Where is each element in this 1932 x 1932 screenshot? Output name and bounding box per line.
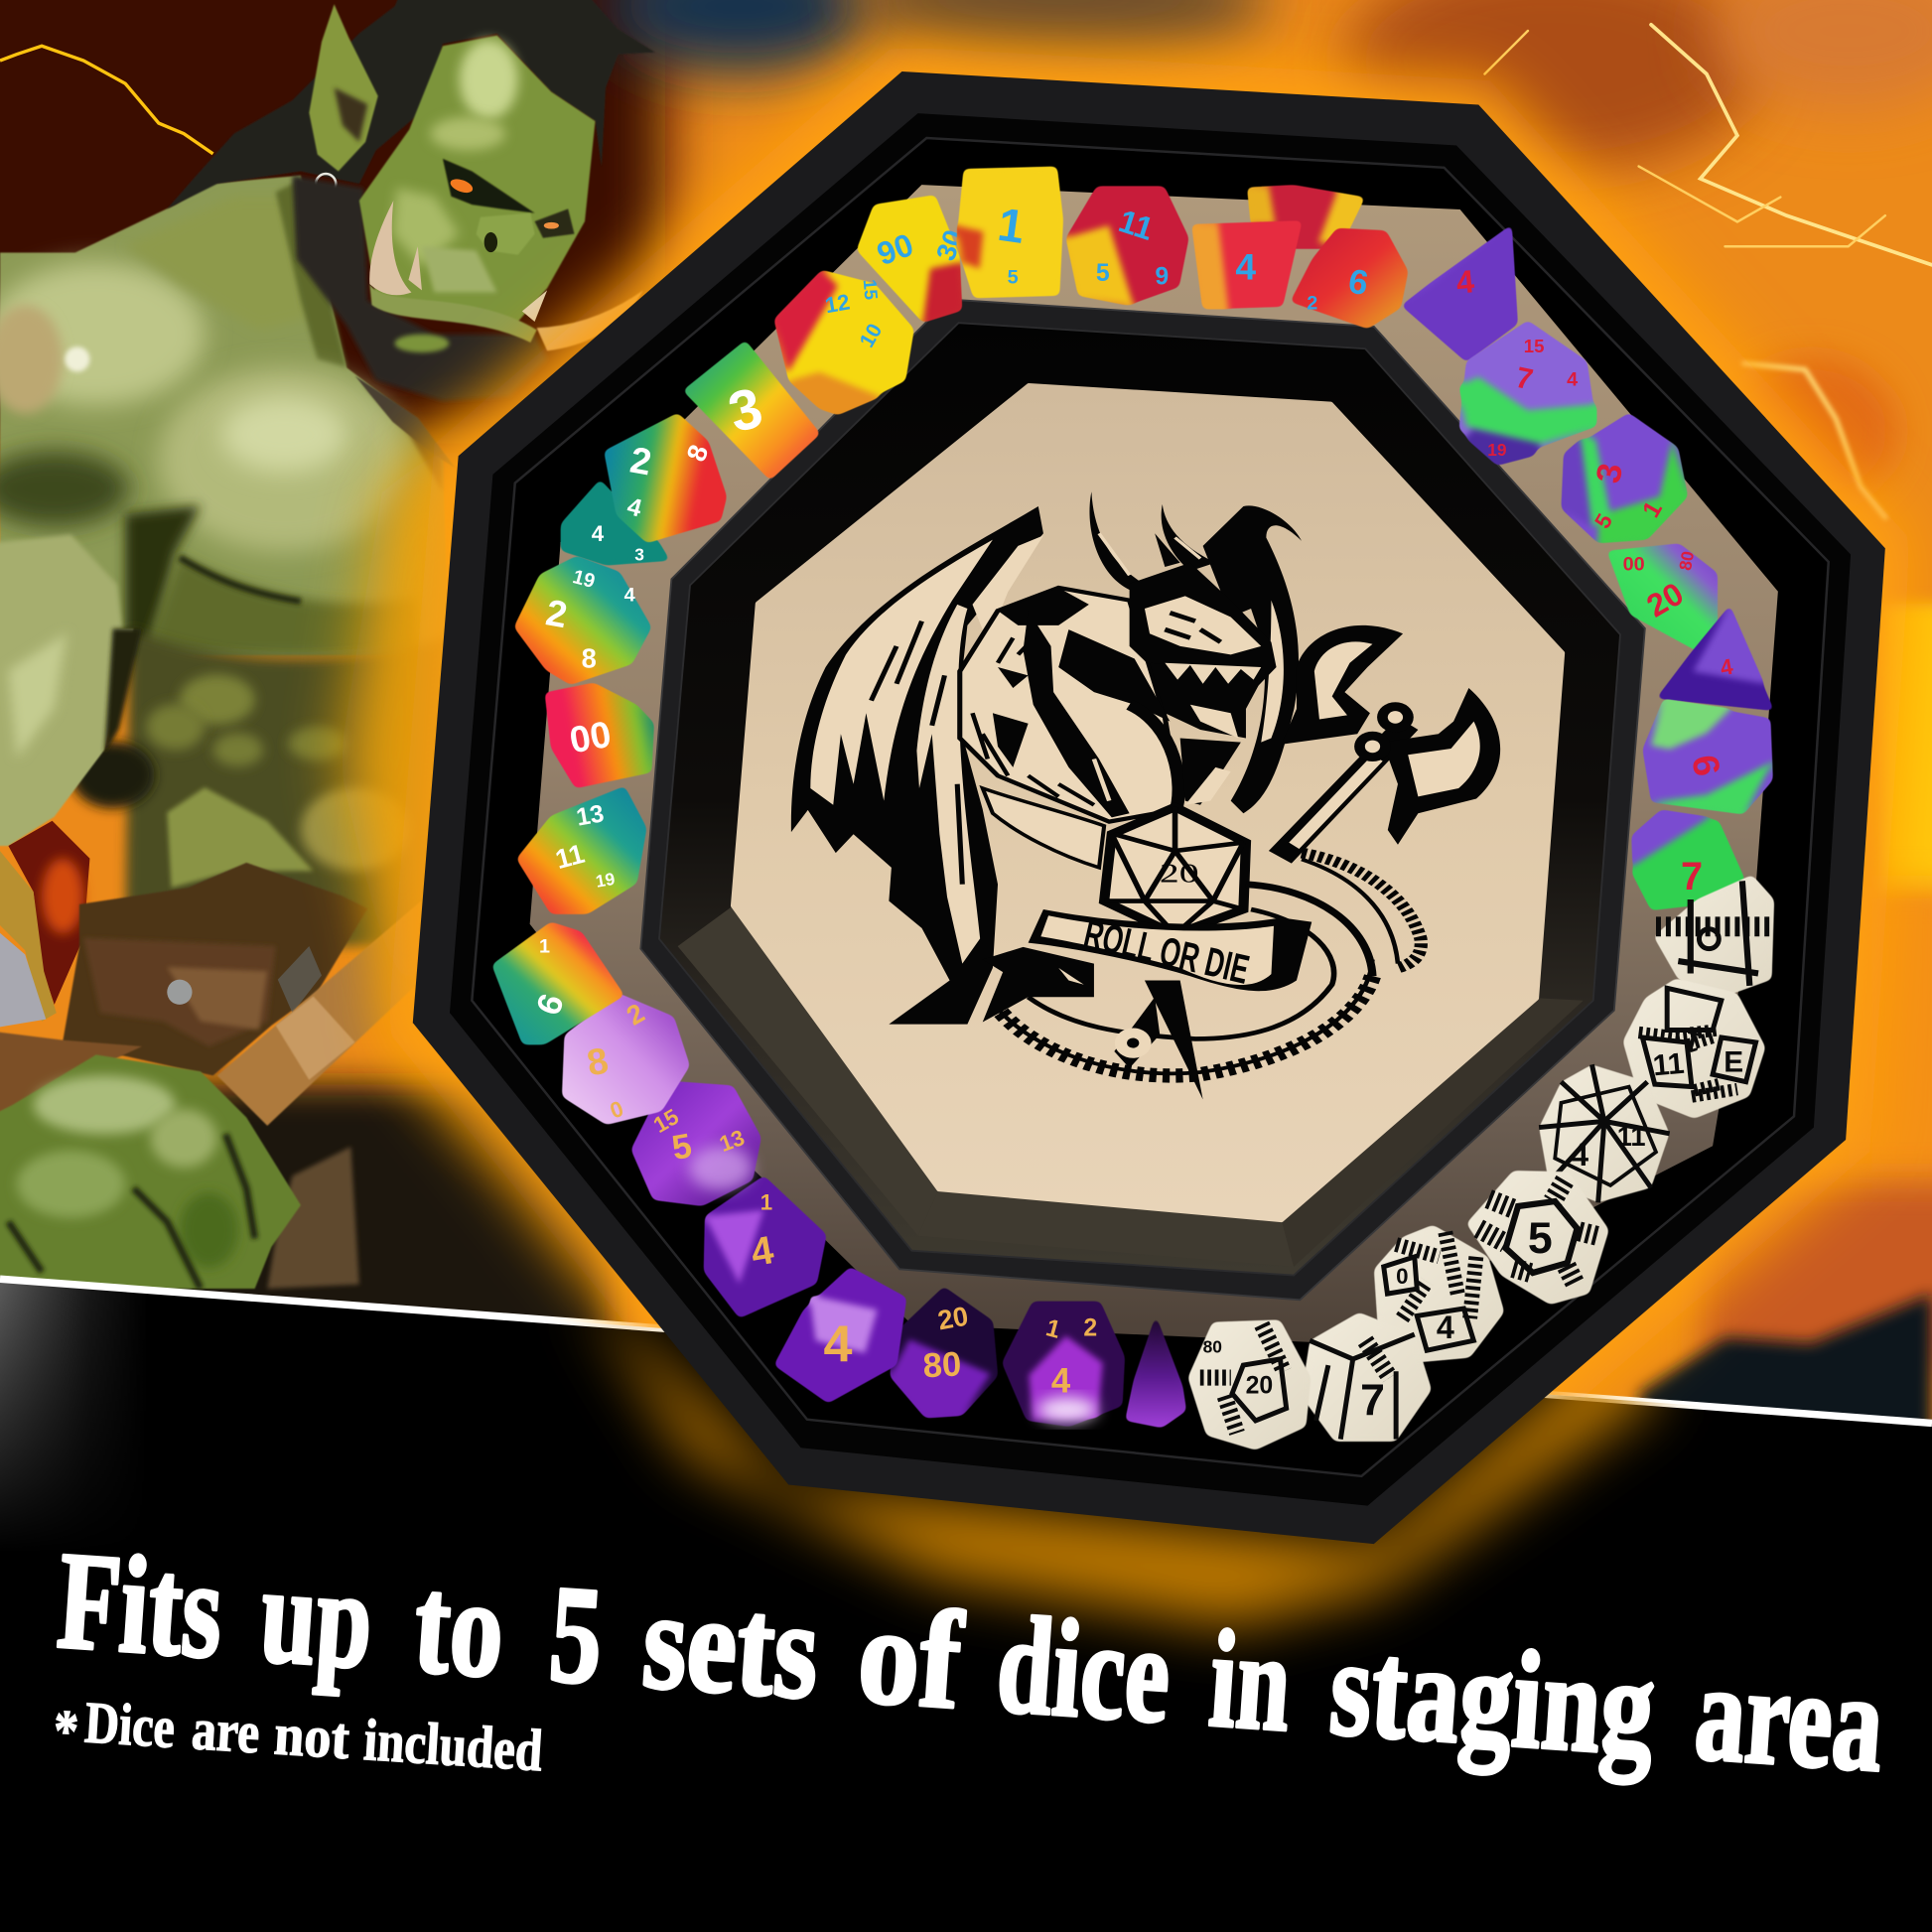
dice set: purple marble with gold numbers: 0 [607, 1096, 626, 1124]
orc arm [0, 628, 134, 846]
dice set: white with black engravings: 80 [1203, 1337, 1222, 1357]
caption: disclaimer: included [362, 1707, 544, 1783]
dragon jaw and teeth [1150, 663, 1266, 738]
caption: disclaimer: Dice [83, 1689, 177, 1760]
dice set: rainbow with white numbers: 4 [624, 493, 644, 523]
orc upper body and head [0, 0, 655, 655]
orange glow behind tray [413, 71, 1885, 1626]
illustration: green orc warrior [0, 0, 655, 1289]
tray wall: lower right [1282, 998, 1584, 1267]
caption: disclaimer [52, 1687, 544, 1793]
dice set: purple marble with gold numbers: 1 [1043, 1314, 1063, 1344]
dice set: rainbow with white numbers: 4 [592, 521, 605, 546]
amber haze over orc edge [339, 419, 530, 1171]
tray felt floor [733, 385, 1563, 1220]
dragon body [960, 588, 1241, 868]
dice set: white with black engravings [1187, 875, 1774, 1450]
dice set: purple and green with red numbers [1401, 224, 1774, 910]
orc lower lip and chin [369, 284, 537, 343]
dragon horns [1089, 491, 1215, 592]
dice set: white with black engravings: 5 [1528, 1214, 1553, 1263]
grey fade at left of band [0, 1269, 148, 1553]
orc hair [167, 0, 655, 208]
dice set: purple and green with red numbers: 19 [1487, 440, 1507, 460]
dice set: rainbow with white numbers: 19 [570, 566, 597, 593]
dice set: red and yellow with blue numbers: 5 [1096, 260, 1110, 287]
dice set: white with black engravings: 20 [1246, 1373, 1273, 1400]
dagger with pentagram lines [1114, 980, 1203, 1099]
caption: headline: in [1205, 1601, 1296, 1761]
caption: headline: 5 [545, 1557, 608, 1714]
caption: headline: of [854, 1578, 968, 1738]
dice set: red and yellow with blue numbers: 1 [995, 198, 1028, 253]
d20 die [1104, 807, 1246, 934]
orc face [359, 36, 596, 322]
axe [1269, 625, 1500, 864]
dice set: red and yellow with blue numbers: 4 [1235, 246, 1256, 288]
dice set: red and yellow with blue numbers: 5 [1008, 266, 1019, 288]
white diagonal line [0, 1279, 1932, 1423]
dice set: rainbow with white numbers: 2 [543, 591, 571, 635]
dice set: white with black engravings: 11 [1651, 1047, 1686, 1082]
dice set: purple and green with red numbers: 4 [1454, 263, 1475, 301]
dice set: purple marble with gold numbers: 8 [584, 1039, 612, 1084]
dice set: purple and green with red numbers: 1 [1638, 496, 1668, 522]
orc ear [309, 4, 378, 194]
dice set: white with black engravings: 7 [1360, 1376, 1385, 1425]
dice set: purple marble with gold numbers: 13 [716, 1125, 748, 1157]
caption: disclaimer: not [272, 1701, 351, 1771]
dice set: purple marble with gold numbers: 1 [760, 1190, 772, 1215]
dice set: rainbow with white numbers: 6 [529, 989, 572, 1020]
dice set: rainbow with white numbers: 4 [624, 585, 635, 607]
dice set: purple marble with gold numbers: 2 [1083, 1314, 1097, 1341]
tray wall: bottom [918, 1189, 1294, 1267]
dice set: red and yellow with blue numbers: 11 [1115, 203, 1158, 247]
dice set: purple and green with red numbers: 6 [1684, 752, 1728, 779]
dice set: rainbow with white numbers: 13 [574, 800, 606, 832]
product: outer octagon dice tray [413, 71, 1885, 1544]
dice set: rainbow with white numbers: 19 [594, 869, 617, 892]
dice set: rainbow with white numbers: 3 [634, 545, 644, 565]
strap on shoulder [355, 376, 456, 468]
dice set: purple marble with gold numbers: 80 [922, 1345, 962, 1385]
dragon head [1130, 563, 1277, 688]
dice set: red and yellow with blue numbers: 6 [1345, 262, 1371, 303]
dice set: purple marble with gold numbers: 15 [649, 1104, 683, 1138]
torn cloth [0, 1032, 142, 1117]
caption: headline [54, 1523, 1888, 1801]
dice set: purple marble with gold numbers: 5 [669, 1127, 695, 1168]
dice set: red and yellow with blue numbers: 90 [873, 226, 918, 272]
dragon artwork on felt [791, 491, 1500, 1099]
dice set: white with black engravings: 4 [1571, 1137, 1588, 1173]
dragon upper wing and mantle [1203, 505, 1302, 813]
dice set: white with black engravings: 11 [1617, 1121, 1646, 1152]
caption: headline: to [410, 1548, 509, 1708]
caption: headline: sets [638, 1564, 823, 1728]
scroll banner [983, 909, 1311, 1023]
orc torso [0, 176, 449, 655]
orc abdomen [71, 628, 451, 946]
dice set: purple and green with red numbers: 3 [1589, 461, 1630, 486]
dice set: purple and green with red numbers: 15 [1524, 336, 1544, 356]
dice set: white with black engravings: 1 [1681, 1024, 1706, 1059]
belt [63, 863, 367, 1075]
dice set: red and yellow with blue numbers: 12 [823, 289, 852, 318]
fur behind hand [267, 1147, 359, 1289]
dice set: purple and green with red numbers: 80 [1675, 550, 1698, 572]
lightning bolts [1484, 25, 1932, 517]
dice set: rainbow with white numbers: 00 [566, 713, 615, 760]
lightning at left [0, 46, 213, 154]
orc lower body, belt and hand [0, 628, 451, 1289]
staging area felt [530, 185, 1778, 1343]
dice set: purple marble with gold numbers: 2 [621, 997, 649, 1032]
caption: headline: staging [1325, 1610, 1659, 1786]
orc tusks [369, 201, 643, 350]
dice set: purple and green with red numbers: 4 [1567, 368, 1578, 390]
dice set: red and yellow with blue numbers: 10 [856, 320, 887, 351]
dice set: white with black engravings: 0 [1396, 1264, 1409, 1289]
dice set: purple marble with gold numbers: 20 [935, 1301, 970, 1335]
dice set: rainbow with white numbers: 1 [539, 935, 550, 957]
dice set: purple and green with red numbers: 4 [1719, 653, 1735, 680]
dice set: purple and green with red numbers: 7 [1681, 855, 1703, 898]
black lower band [0, 1279, 1932, 1932]
inner removable tray [640, 300, 1645, 1300]
dice set: rainbow with white numbers: 3 [722, 375, 769, 445]
gap behind arm with embers [8, 821, 89, 1005]
dice set: rainbow with white numbers [491, 341, 821, 1044]
tray wall: lower left [678, 905, 939, 1236]
caption: headline: dice [993, 1587, 1175, 1752]
dice set: purple marble with gold numbers [562, 993, 1186, 1428]
dice set: purple marble with gold numbers: 4 [823, 1315, 852, 1373]
banner text: ROLL OR DIE [1080, 910, 1253, 993]
dice set: white with black engravings: E [1724, 1046, 1743, 1079]
dice set: purple and green with red numbers: 00 [1623, 554, 1645, 576]
axe handle [217, 900, 422, 1126]
d20 number on tray art: 20 [1160, 859, 1199, 889]
caption: headline: Fits [54, 1523, 227, 1688]
dice set: rainbow with white numbers: 11 [552, 838, 588, 875]
orc beard [293, 176, 547, 401]
dice set: rainbow with white numbers: 8 [582, 643, 597, 674]
sword held by dragon [1024, 611, 1130, 817]
background: stormy orange sky [0, 0, 1932, 1478]
caption: disclaimer: * [52, 1697, 80, 1764]
caption: headline: up [256, 1537, 377, 1699]
dice set: purple marble with gold numbers: 4 [1051, 1362, 1071, 1400]
dice set: purple marble with gold numbers: 4 [748, 1228, 776, 1275]
dice set: purple and green with red numbers: 20 [1641, 575, 1690, 624]
yellow cloth and axe blade [0, 846, 57, 1022]
dice set: red and yellow with blue numbers: 30 [929, 225, 969, 264]
caption: disclaimer: are [190, 1696, 262, 1765]
dice set: rainbow with white numbers: 8 [680, 441, 714, 466]
dice set: red and yellow with blue numbers: 15 [860, 278, 882, 301]
dice set: purple and green with red numbers: 5 [1589, 509, 1617, 532]
dice set: rainbow with white numbers: 2 [627, 439, 654, 483]
dice set: white with black engravings: 4 [1437, 1310, 1454, 1345]
dice set: red and yellow with blue numbers: 2 [1307, 293, 1317, 315]
dice set: purple and green with red numbers: 7 [1513, 361, 1536, 397]
dice set: red and yellow with blue numbers: 9 [1155, 264, 1169, 291]
dice set: red and yellow with blue numbers [773, 167, 1409, 415]
dragon tail coil [995, 853, 1421, 1075]
orc hand [0, 1054, 301, 1289]
dragon wing [791, 506, 1043, 1025]
